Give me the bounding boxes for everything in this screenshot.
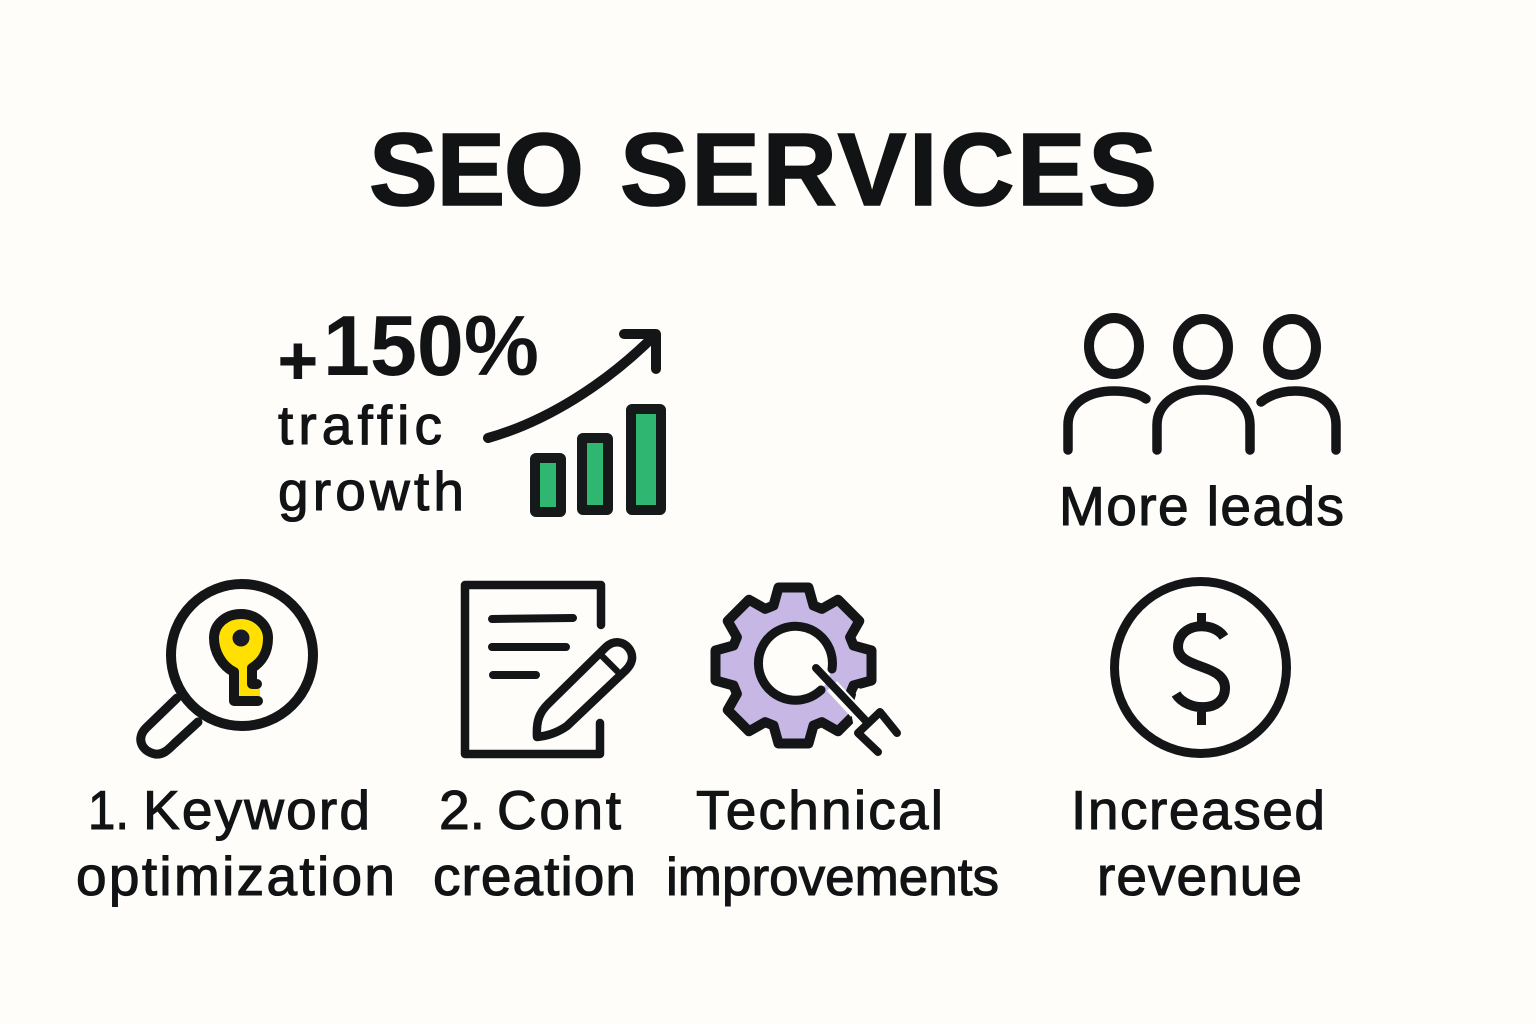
label: traffic growth: traffic [278,394,442,456]
statistic: +150%: + [278,323,318,399]
label: 2. Cont creation: creation [433,845,636,907]
label: 2. Cont creation [433,779,636,907]
title: SERVICES [620,112,1157,227]
icon: document and pencil [465,585,632,754]
panel: technical improvements [666,588,999,907]
label: Technical improvements [666,779,999,907]
label: 1. Keyword optimization: optimization [76,845,395,907]
title: SEO [369,112,584,227]
label: 1. Keyword optimization: 1. [88,779,129,841]
label: 2. Cont creation: 2. [439,779,485,841]
title [369,112,1157,227]
label: Increased revenue: Increased [1071,779,1325,841]
label: Technical improvements: improvements [666,848,999,907]
label: 1. Keyword optimization: Keyword [143,779,370,841]
icon: gear and wrench [716,588,900,760]
label: 1. Keyword optimization [76,779,395,907]
label: 2. Cont creation: Cont [497,779,621,841]
icon: magnifier with key [141,584,313,754]
icon: bar chart [535,409,661,512]
label: traffic growth [278,394,464,522]
label: traffic growth: growth [278,460,464,522]
panel: increased revenue [1071,582,1325,907]
label: more leads: More leads [1059,475,1344,537]
icon: rising arrow [488,334,656,438]
label: Technical improvements: Technical [696,779,943,841]
icon: dollar coin [1114,582,1286,754]
panel: traffic growth [278,299,661,522]
icon: three people [1068,318,1336,450]
statistic: +150%: 150% [323,299,539,394]
panel: content creation [433,585,636,907]
panel: more leads [1059,318,1344,537]
panel: keyword optimization [76,584,395,907]
label: Increased revenue: revenue [1097,845,1302,907]
label: Increased revenue [1071,779,1325,907]
